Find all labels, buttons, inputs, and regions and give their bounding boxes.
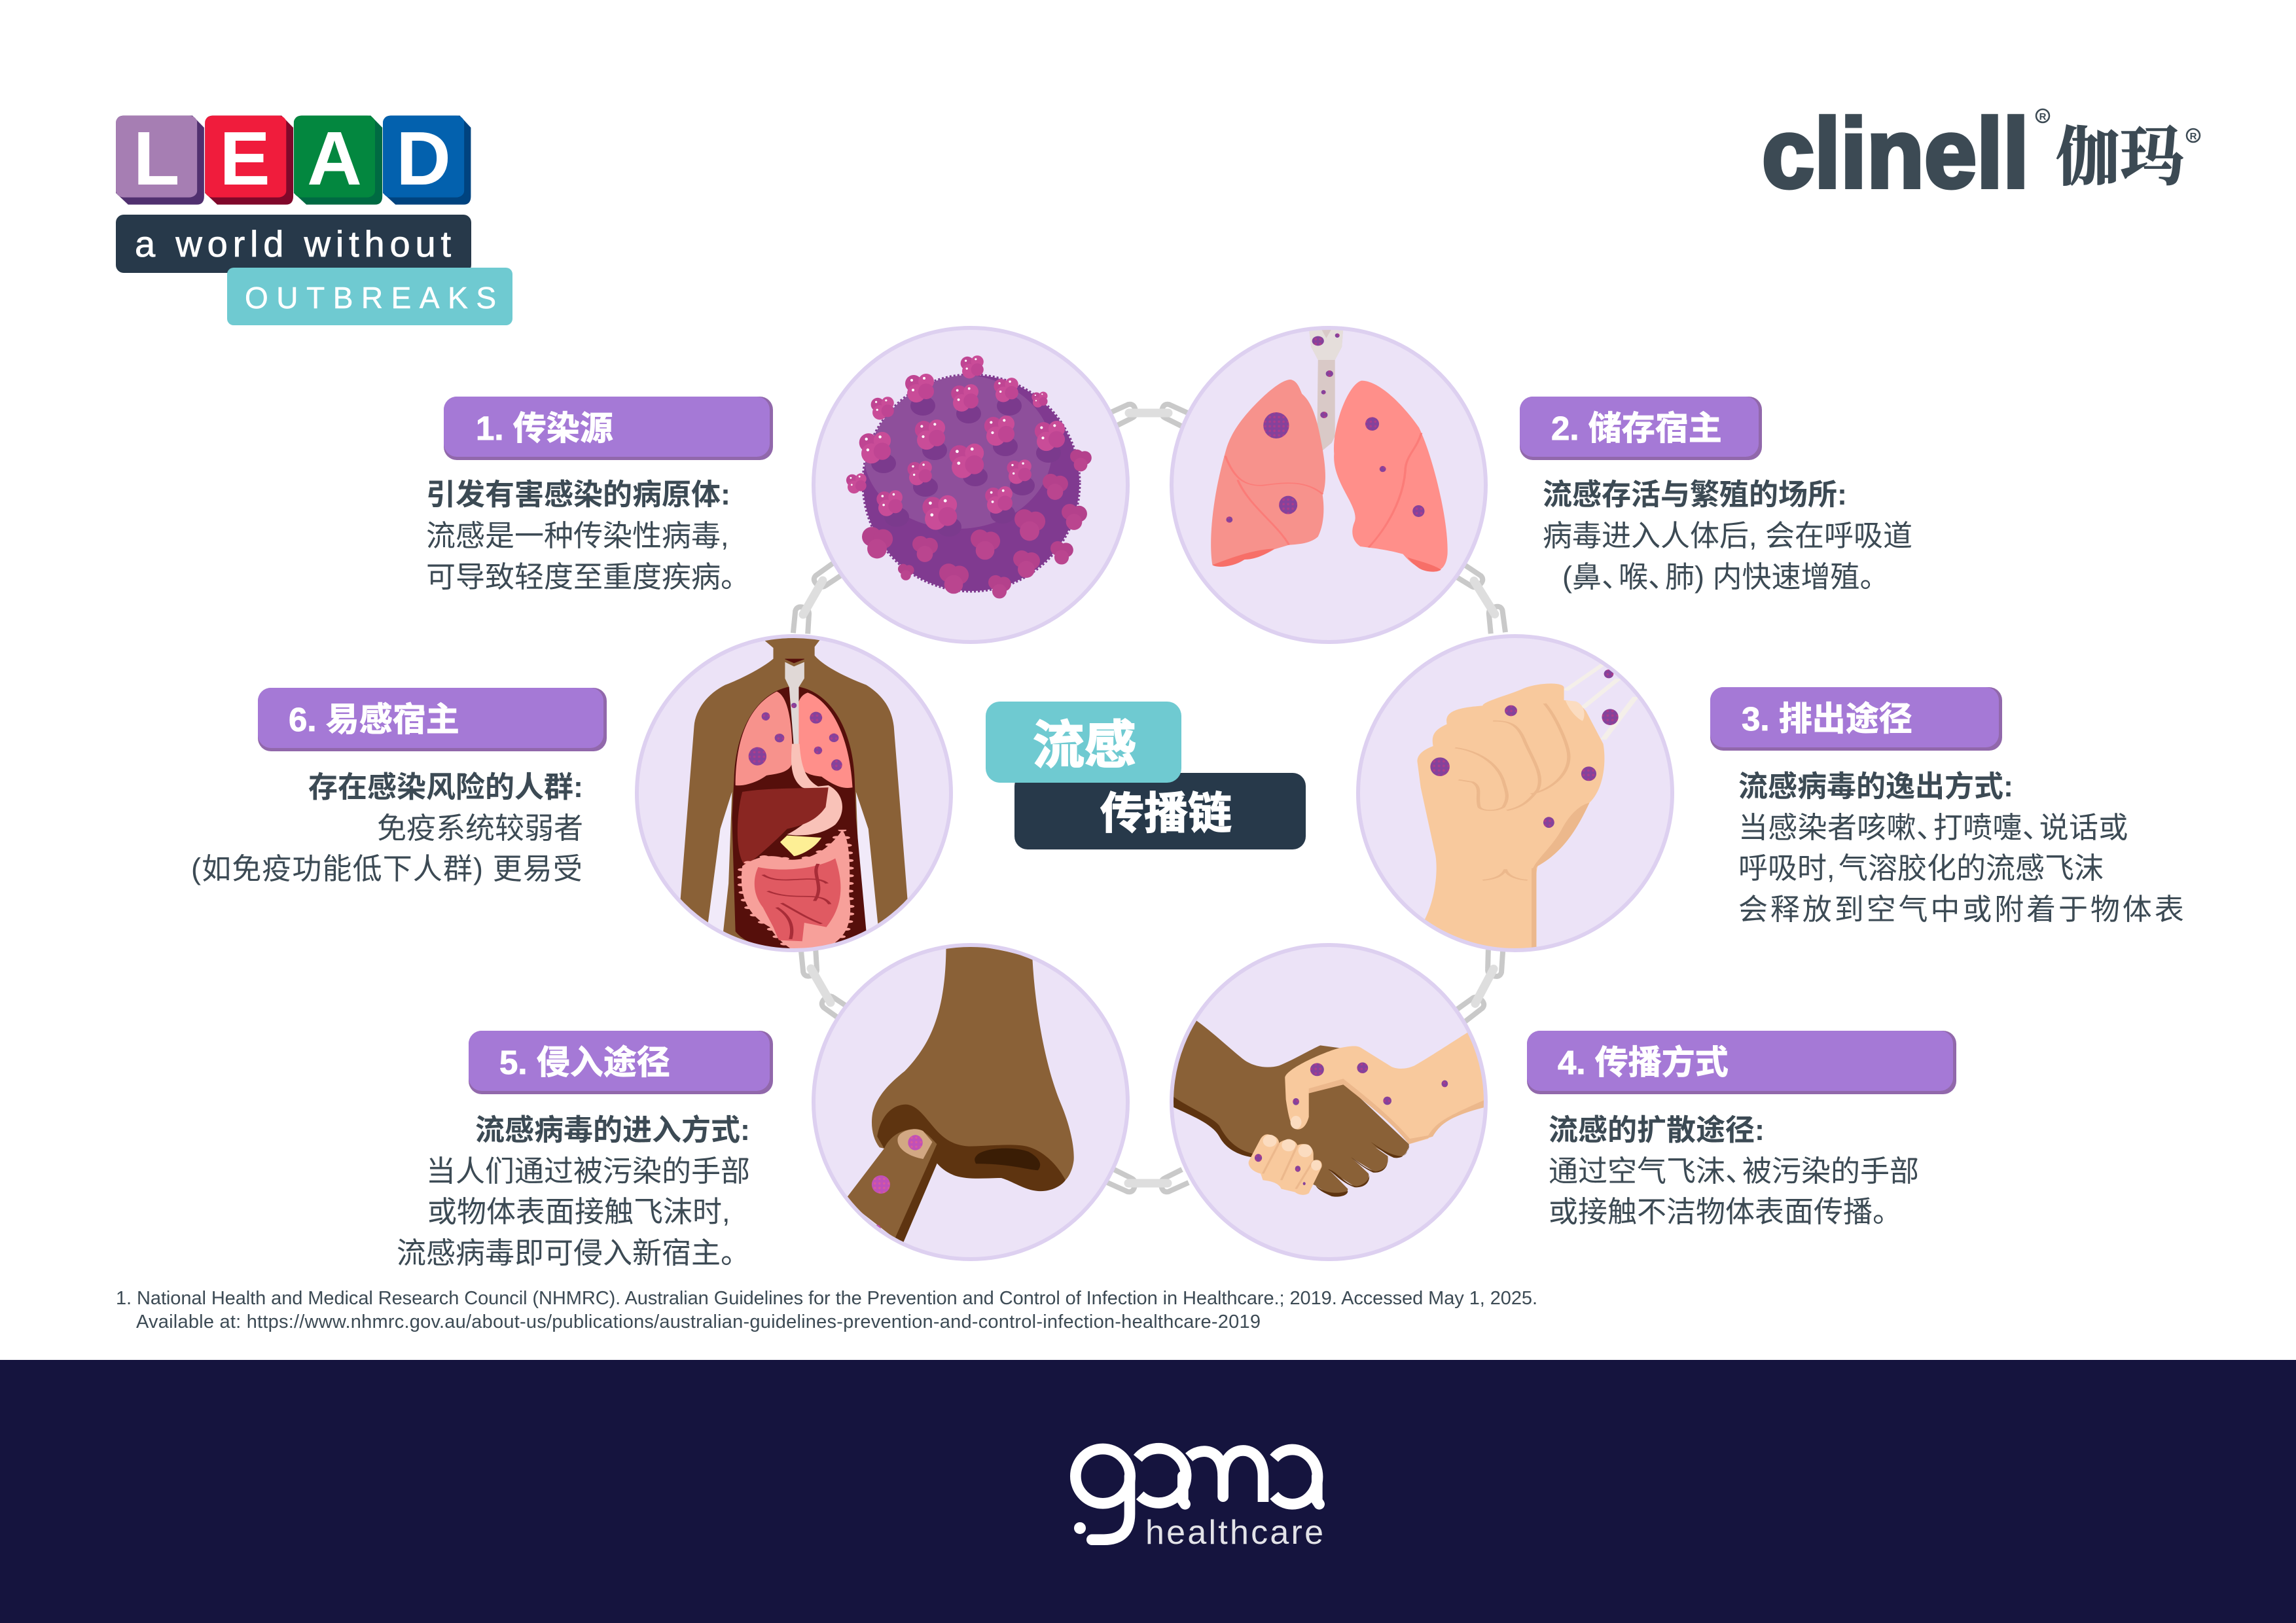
circle 2: lungs illustration	[1170, 327, 1487, 643]
center title: influenza transmission chain	[986, 702, 1306, 849]
chain links	[785, 404, 1513, 1192]
gama healthcare logo	[1074, 1448, 1323, 1552]
LEAD letter blocks: D	[396, 116, 451, 201]
OUTBREAKS bar	[227, 268, 512, 325]
label pill 6: 6. 易感宿主	[289, 701, 459, 738]
text block 6: (如免疫功能低下人群) 更易受	[191, 852, 583, 885]
panel 6: susceptible host	[191, 688, 607, 885]
text block 4	[1549, 1113, 1919, 1228]
circle 4: handshake illustration	[1166, 944, 1488, 1260]
text block 1: 流感是一种传染性病毒,	[426, 519, 729, 552]
circle 6: human torso anatomy illustration	[636, 635, 952, 952]
text block 3: 会释放到空气中或附着于物体表	[1738, 893, 2187, 926]
label pill 6	[258, 688, 607, 751]
text block 3: 流感病毒的逸出方式:	[1738, 770, 2013, 803]
LEAD letter blocks	[116, 116, 471, 205]
panel 2: reservoir	[1520, 397, 1912, 594]
text block 1	[426, 478, 750, 594]
label pill 4	[1527, 1031, 1956, 1094]
clinell logo: 伽玛	[2056, 123, 2184, 194]
text block 4: 通过空气飞沫、被污染的手部	[1549, 1154, 1919, 1188]
text block 3: 当感染者咳嗽、打喷嚏、说话或	[1738, 811, 2128, 844]
LEAD letter blocks: L	[134, 116, 179, 201]
footnote reference: 1. National Health and Medical Research Council (NHMRC). Australian Guidelines for the Prevention and Control of Infection in Healthcare.; 2019. Accessed May 1, 2025.	[116, 1288, 1537, 1309]
text block 5: 当人们通过被污染的手部	[426, 1154, 750, 1188]
text block 2: (鼻、喉、肺) 内快速增殖。	[1562, 560, 1890, 594]
clinell logo: R	[2039, 111, 2047, 122]
text block 4: 流感的扩散途径:	[1549, 1113, 1765, 1147]
LEAD logo	[116, 116, 512, 325]
gama healthcare logo: healthcare	[1145, 1514, 1323, 1552]
LEAD letter blocks: A	[307, 116, 362, 201]
text block 2: 病毒进入人体后, 会在呼吸道	[1543, 519, 1912, 552]
title teal box	[986, 702, 1181, 783]
panel 4: transmission mode	[1527, 1031, 1956, 1228]
OUTBREAKS bar: OUTBREAKS	[245, 281, 496, 315]
a world without bar	[116, 215, 471, 273]
label pill 2: 2. 储存宿主	[1551, 410, 1722, 447]
text block 5	[397, 1113, 750, 1270]
footnote reference	[116, 1288, 1537, 1332]
text block 5: 流感病毒即可侵入新宿主。	[397, 1236, 750, 1270]
LEAD letter blocks: E	[219, 116, 270, 201]
clinell logo: clinell	[1762, 98, 2029, 208]
text block 6: 免疫系统较弱者	[377, 812, 583, 845]
text block 2: 流感存活与繁殖的场所:	[1543, 478, 1847, 511]
text block 5: 流感病毒的进入方式:	[475, 1113, 750, 1147]
footer band	[0, 1360, 2296, 1623]
label pill 1: 1. 传染源	[476, 410, 613, 447]
panel 5: entry route	[397, 1031, 773, 1270]
clinell logo	[1762, 98, 2200, 208]
label pill 1	[444, 397, 773, 460]
text block 3: 呼吸时, 气溶胶化的流感飞沫	[1738, 851, 2104, 885]
text block 6: 存在感染风险的人群:	[308, 770, 583, 804]
label pill 5	[469, 1031, 773, 1094]
title teal box: 流感	[1033, 716, 1136, 774]
text block 2	[1543, 478, 1912, 594]
footnote reference: Available at: https://www.nhmrc.gov.au/about-us/publications/australian-guidelines-prevention-and-control-infection-healthcare-2019	[136, 1311, 1261, 1332]
text block 1: 引发有害感染的病原体:	[426, 478, 730, 511]
title dark box: 传播链	[1100, 789, 1232, 838]
circle 5: nose and finger illustration	[812, 944, 1129, 1260]
text block 5: 或物体表面接触飞沫时,	[427, 1195, 730, 1228]
text block 3	[1738, 770, 2187, 926]
text block 4: 或接触不洁物体表面传播。	[1549, 1195, 1902, 1228]
circle 1: virus illustration	[812, 327, 1129, 643]
title dark box	[1014, 773, 1306, 849]
text block 1: 可导致轻度至重度疾病。	[426, 560, 750, 594]
panel 1: source	[426, 397, 773, 594]
label pill 3: 3. 排出途径	[1742, 700, 1912, 738]
label pill 3	[1710, 687, 2002, 751]
label pill 2	[1520, 397, 1762, 460]
a world without bar: a world without	[135, 223, 451, 264]
circle 3: fist with droplets illustration	[1357, 635, 1674, 954]
clinell logo: R	[2190, 131, 2197, 142]
label pill 4: 4. 传播方式	[1558, 1044, 1729, 1081]
panel 3: exit route	[1710, 687, 2187, 926]
text block 6	[191, 770, 583, 885]
label pill 5: 5. 侵入途径	[499, 1044, 670, 1081]
